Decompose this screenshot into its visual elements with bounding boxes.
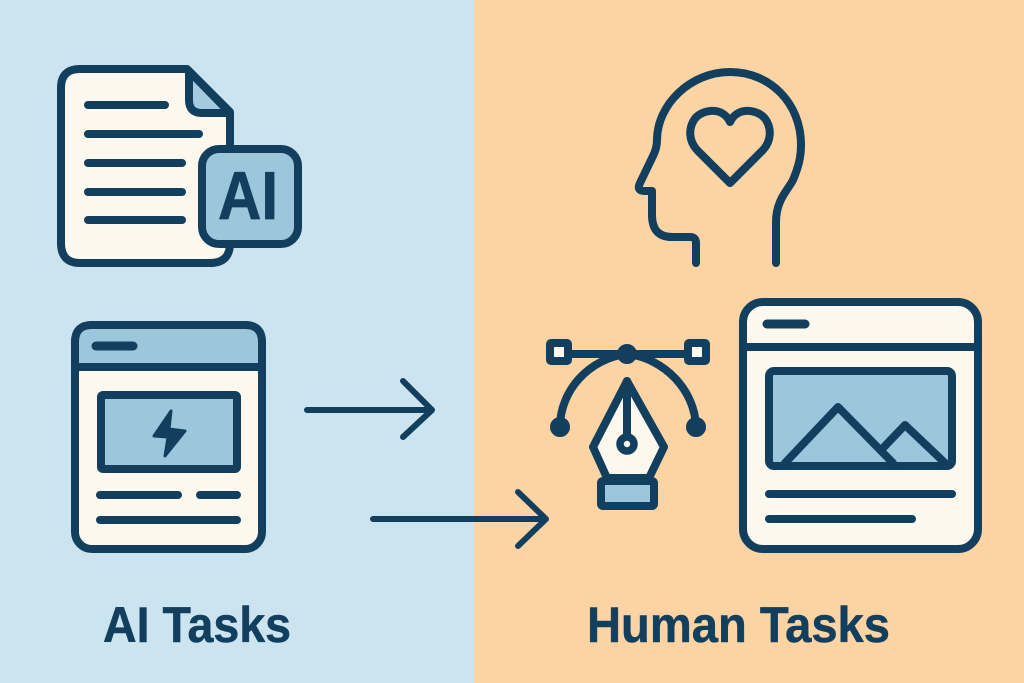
heading: Human Tasks: Human Tasks [587,597,890,653]
icon: image web page [743,302,978,549]
arrow: lower [373,492,546,546]
icon: pen tool [550,343,706,506]
icon: AI web page [75,325,262,549]
arrow: upper [307,381,432,437]
panel: human tasks background [474,0,1024,683]
heading: AI Tasks: AI Tasks [103,597,291,653]
icon: AI document: AI [218,158,278,234]
icon: head with heart [639,72,801,263]
panel: AI tasks background [0,0,474,683]
icon: AI document [61,69,298,263]
